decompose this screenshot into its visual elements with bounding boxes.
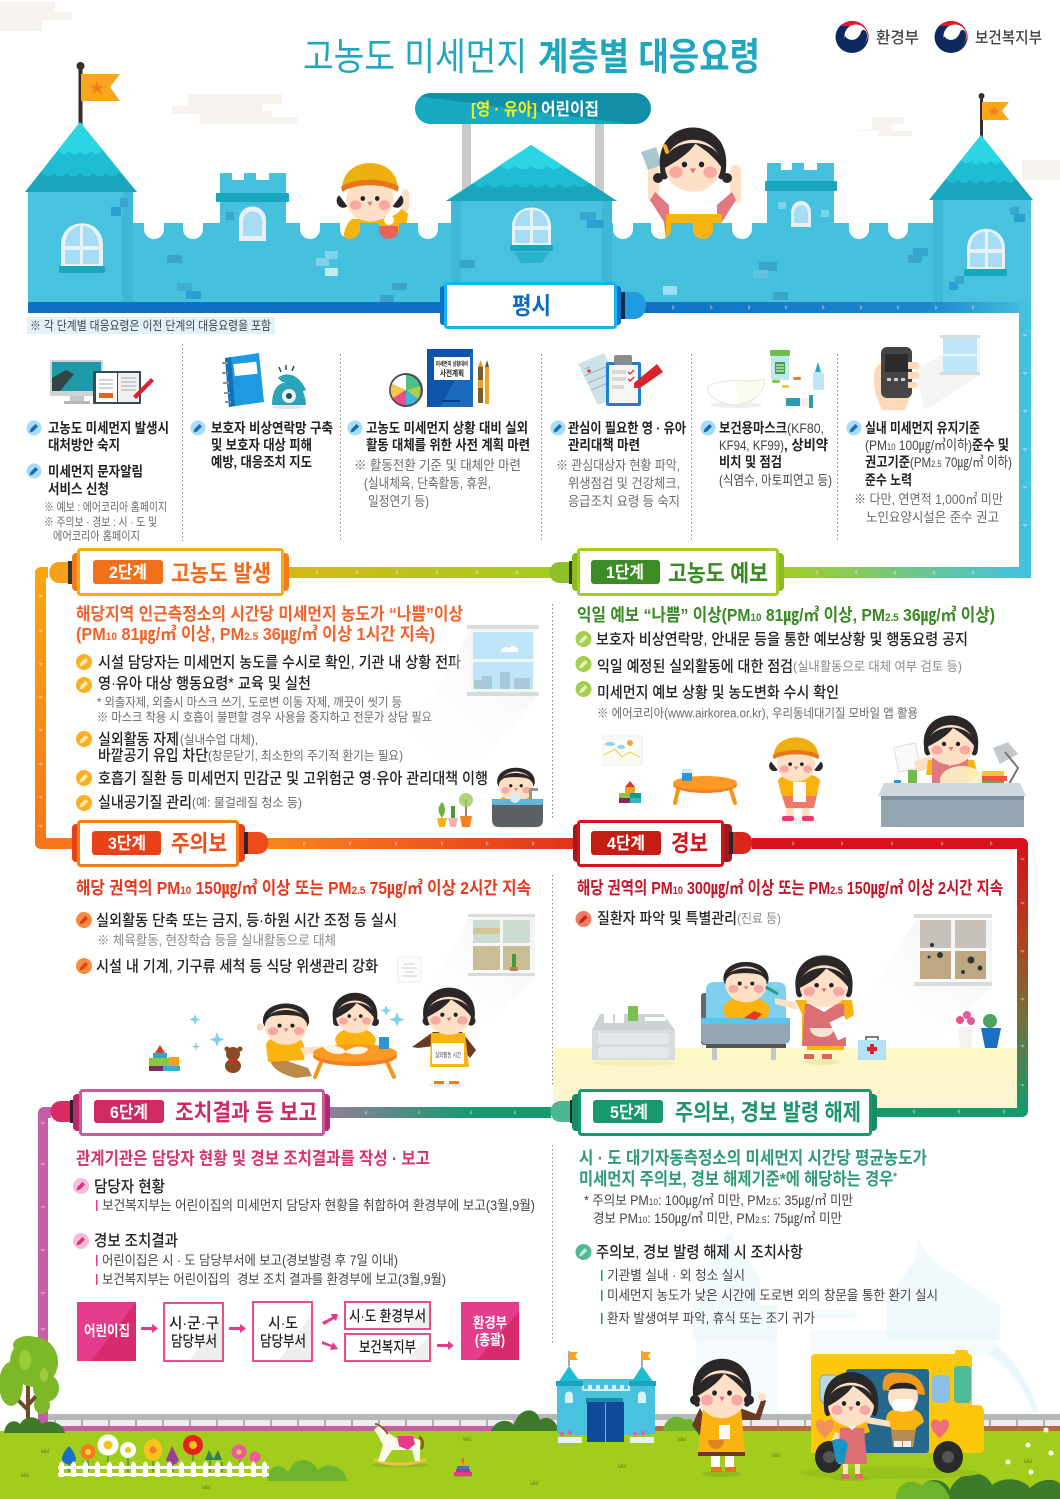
- timeline: magenta left bar and green connector: [38, 1107, 551, 1425]
- icon: clipboard and pencil: [578, 353, 663, 406]
- child in bus with mask: [883, 1373, 925, 1447]
- bullet: [576, 1244, 592, 1260]
- panel: 평시 column 6: ※ 다만, 연면적 1,000㎡ 미만: [854, 492, 1003, 507]
- box: 시도 담당부서: 시·도: [268, 1315, 298, 1332]
- icon: clock and plan book: [389, 349, 489, 407]
- panel: 평시 column 3: 일정연기 등): [368, 494, 429, 509]
- blocks: [149, 1045, 180, 1071]
- title: [303, 37, 760, 79]
- icon: hand with air monitor and window: [874, 335, 980, 410]
- school bus: [800, 1350, 984, 1479]
- sign: 영유아 어린이집: [영 · 유아]: [471, 100, 537, 119]
- window: small tower right: [791, 201, 811, 227]
- bullet: [846, 420, 862, 436]
- bullet: [76, 731, 92, 747]
- panel: 2단계 text: [76, 604, 488, 812]
- bullet: [576, 911, 592, 927]
- title: 계층별 대응요령: [538, 37, 760, 79]
- mini castle: [556, 1351, 656, 1443]
- panel: 2단계 text: 해당지역 인근측정소의 시간당 미세먼지 농도가 “나쁨”이상: [76, 604, 463, 624]
- panel: 2단계 text: 호흡기 질환 등 미세먼지 민감군 및 고위험군 영·유아 관리대책 이행: [98, 770, 488, 788]
- bullet: [26, 420, 42, 436]
- panel: 6단계 text: 담당자 현황: [94, 1178, 165, 1196]
- heading: 4단계 경보: 4단계: [607, 834, 645, 853]
- heading: 4단계 경보: 경보: [671, 830, 708, 856]
- castle tower left: [25, 122, 137, 303]
- panel: 5단계 text: *: [893, 1171, 898, 1183]
- title: 고농도 미세먼지: [303, 37, 527, 79]
- table: [313, 1037, 397, 1077]
- heading: 6단계 조치결과 등 보고: 조치결과 등 보고: [175, 1099, 317, 1125]
- illustration: child reading: [769, 737, 823, 824]
- panel: 평시 column 4: 관심이 필요한 영 · 유아: [568, 420, 686, 436]
- heading: 6단계 조치결과 등 보고: 6단계: [110, 1103, 148, 1122]
- illustration: floor: [553, 1048, 1017, 1108]
- panel: 평시 column 4: 관리대책 마련: [568, 437, 640, 453]
- illustration: weather poster: [603, 736, 642, 765]
- timeline: 평시 blue bar: [28, 302, 1031, 578]
- character: teacher on wall: [641, 127, 741, 262]
- illustration: clear window: [395, 625, 539, 760]
- bear: [224, 1046, 242, 1073]
- panel: 평시 column 1: 고농도 미세먼지 발생시: [48, 420, 169, 436]
- grass: [0, 1431, 1060, 1499]
- bullet: [576, 681, 592, 697]
- bullet: [76, 912, 92, 928]
- sparkles: [190, 1005, 404, 1051]
- panel: 2단계 text: (창문닫기, 최소한의 주기적 환기는 필요): [208, 749, 403, 763]
- heading: 5단계 주의보 경보 발령 해제: [550, 1090, 877, 1134]
- small castle tower right: [765, 163, 837, 234]
- panel: 평시 column 1: ※ 예보 : 에어코리아 홈페이지: [44, 500, 167, 514]
- panel: 평시 column 3: [348, 349, 530, 509]
- panel: 2단계 text: 영·유아 대상 행동요령* 교육 및 실천: [98, 674, 311, 692]
- heading: 1단계 고농도 예보: 1단계: [606, 563, 644, 582]
- panel: 3단계 text: 해당 권역의 PM10 150㎍/㎥ 이상 또는 PM2.5 75㎍/㎥ 이상 2시간 지속: [76, 878, 531, 899]
- panel: 2단계 text: (예: 물걸레질 청소 등): [192, 796, 302, 810]
- panel: 5단계 text: 기관별 실내 · 외 청소 실시: [607, 1268, 745, 1283]
- illustration: dusty window: [835, 914, 992, 1048]
- teacher waving: [690, 1359, 766, 1477]
- flowers: [62, 1434, 260, 1472]
- panel: 평시 column 3: 고농도 미세먼지 상황 대비 실외: [366, 420, 528, 436]
- heading: 3단계 주의보: 3단계: [108, 834, 146, 853]
- tree: [0, 1336, 65, 1433]
- panel: 평시 column 5: (식염수, 아토피연고 등): [719, 473, 832, 488]
- dividers: [182, 344, 838, 1345]
- illustration: hazy window with cactus: [410, 914, 535, 1025]
- illustration: paper note: [398, 957, 421, 982]
- box: 시도 환경부서: [345, 1302, 430, 1329]
- bullet: [550, 420, 566, 436]
- panel: 평시 column 6: (PM10 100㎍/㎥이하): [865, 437, 972, 454]
- grass tufts: [21, 1436, 1032, 1489]
- panel: 평시 column 3: (실내체육, 단축활동, 휴원,: [364, 476, 491, 491]
- panel: 1단계 text: [576, 605, 995, 720]
- illustration: orange table: [673, 769, 737, 803]
- panel: 6단계 text: 어린이집은 시 · 도 담당부서에 보고(경보발령 후 7일 이내): [102, 1253, 398, 1268]
- panel: 1단계 text: 익일 예보 “나쁨” 이상(PM10 81㎍/㎥ 이상, PM2.5 36㎍/㎥ 이상): [577, 605, 995, 626]
- panel: 1단계 text: (실내활동으로 대체 여부 검토 등): [793, 659, 962, 674]
- castle wall: [133, 223, 935, 303]
- heading: 평시: 평시: [512, 293, 551, 320]
- bullet: [26, 464, 42, 478]
- bullet: [76, 958, 92, 974]
- box: 시군구 담당부서: 담당부서: [171, 1333, 217, 1350]
- box: 보건복지부: 보건복지부: [359, 1339, 416, 1356]
- teacher: [412, 988, 476, 1088]
- panel: 평시 column 1: 에어코리아 홈페이지: [53, 529, 140, 543]
- logo: 환경부: 환경부: [876, 29, 919, 47]
- bullet: [76, 654, 92, 670]
- panel: 3단계 text: ※ 체육활동, 현장학습 등을 실내활동으로 대체: [97, 933, 336, 948]
- heading: 평시: [440, 284, 646, 328]
- panel: 평시 column 1: 서비스 신청: [48, 481, 109, 497]
- icon: mask and medicine: [708, 350, 824, 408]
- bullet: [576, 656, 592, 672]
- box: 시도 담당부서: 담당부서: [260, 1333, 306, 1350]
- panel: 평시 column 6: 준수 노력: [865, 472, 912, 488]
- box: 시도 담당부서: [253, 1302, 312, 1361]
- panel: 4단계 text: [576, 878, 1003, 928]
- panel: 평시 column 5: (KF80,: [787, 420, 824, 436]
- box: 환경부 총괄: (총괄): [475, 1332, 505, 1349]
- panel: 평시 column 4: ※ 관심대상자 현황 파악,: [556, 458, 680, 473]
- fence: [48, 1414, 1060, 1431]
- panel: 2단계 text: 실외활동 자제: [98, 730, 179, 748]
- icon: clock and plan book: 미세먼지 상황대비: [436, 360, 468, 368]
- ground scene: [0, 1336, 1060, 1499]
- box: 어린이집: 어린이집: [84, 1323, 130, 1340]
- box: 환경부 총괄: 환경부: [473, 1315, 507, 1332]
- panel: 평시 column 6: 권고기준: [865, 454, 910, 470]
- boy: [256, 1004, 324, 1078]
- timeline: orange left bar and green connector: [35, 567, 551, 849]
- panel: 평시 column 2: 및 보호자 대상 피해: [211, 437, 312, 453]
- panel: 2단계 text: * 외출자제, 외출시 마스크 쓰기, 도로변 이동 자제, 깨끗이 씻기 등: [97, 696, 402, 710]
- icon: notebook and telephone: [222, 353, 306, 409]
- panel: 2단계 text: 바깥공기 유입 차단: [98, 746, 208, 764]
- flow chart: reporting chain: [77, 1302, 519, 1361]
- panel: 평시 column 3: 활동 대체를 위한 사전 계획 마련: [366, 437, 530, 453]
- illustration: children with table and teacher: [149, 988, 476, 1088]
- character: child in yellow hat on wall: [337, 163, 409, 262]
- bullet: [76, 770, 92, 786]
- panel: 6단계 text: 보건복지부는 어린이집의 미세먼지 담당자 현황을 취합하여 환경부에 보고(3월,9월): [102, 1198, 535, 1213]
- logo: 환경부: [836, 21, 919, 53]
- panel: 3단계 text: [76, 878, 531, 976]
- illustration: first aid kit and plants: [858, 1011, 1001, 1060]
- panel: 평시 column 2: 보호자 비상연락망 구축: [211, 420, 333, 436]
- panel: 2단계 text: (PM10 81㎍/㎥ 이상, PM2.5 36㎍/㎥ 이상 1시간 지속): [76, 624, 435, 645]
- bullet: [576, 631, 592, 647]
- arrow: [141, 1324, 158, 1333]
- illustration: potted plants: [437, 793, 473, 827]
- illustration: sick child on sofa: [701, 962, 790, 1060]
- panel: 4단계 text: 해당 권역의 PM10 300㎍/㎥ 이상 또는 PM2.5 150㎍/㎥ 이상 2시간 지속: [577, 878, 1003, 899]
- heading: 5단계 주의보 경보 발령 해제: 주의보, 경보 발령 해제: [675, 1099, 861, 1125]
- rocking horse: [372, 1424, 428, 1468]
- illustration: teacher with thermometer: [765, 955, 854, 1065]
- panel: 1단계 text: 보호자 비상연락망, 안내문 등을 통한 예보상황 및 행동요령 공지: [596, 630, 968, 648]
- box: 어린이집: [77, 1302, 136, 1361]
- daisies: [1006, 1428, 1054, 1474]
- panel: 4단계 text: 질환자 파악 및 특별관리: [597, 910, 737, 928]
- panel: 5단계 text: 미세먼지 주의보, 경보 해제기준*에 해당하는 경우: [579, 1169, 937, 1189]
- panel: 평시 column 1: 미세먼지 문자알림: [48, 464, 143, 480]
- logo: 보건복지부: 보건복지부: [975, 29, 1042, 47]
- bullet: [76, 795, 92, 811]
- illustration: teacher at desk: [878, 716, 1026, 827]
- panel: 2단계 text: (실내수업 대체),: [180, 733, 258, 747]
- panel: 1단계 text: ※ 에어코리아(www.airkorea.or.kr), 우리동네대기질 모바일 앱 활용: [597, 706, 918, 720]
- panel: 평시 column 2: [190, 353, 333, 470]
- arrow down: [322, 1341, 338, 1350]
- logo: 보건복지부: [934, 21, 1042, 53]
- arrow up: [322, 1314, 338, 1325]
- panel: 6단계 text: 보건복지부는 어린이집의 경보 조치 결과를 환경부에 보고(3월,9월): [102, 1272, 446, 1287]
- bullet: [73, 1233, 89, 1249]
- bullet: [348, 420, 362, 436]
- panel: 평시 column 5: 보건용마스크: [719, 420, 787, 436]
- heading: 2단계 고농도 발생: 고농도 발생: [171, 560, 271, 586]
- panel: 평시 column 3: ※ 활동전환 기준 및 대체안 마련: [354, 458, 521, 473]
- bullet: [190, 420, 206, 436]
- sign: 영유아 어린이집: 어린이집: [541, 100, 599, 119]
- note: ※ 각 단계별 대응요령은 이전 단계의 대응요령을 포함: [30, 319, 271, 333]
- panel: 평시 column 1: [26, 360, 169, 543]
- panel: 평시 column 6: [846, 335, 1012, 525]
- panel: 평시 column 5: [700, 350, 832, 488]
- heading: 6단계 조치결과 등 보고: [50, 1090, 330, 1134]
- panel: 평시 column 5: , 상비약: [784, 437, 828, 453]
- illustration: cabinet: [592, 1006, 676, 1066]
- panel: 5단계 text: 시 · 도 대기자동측정소의 미세먼지 시간당 평균농도가: [579, 1148, 927, 1168]
- icon: monitor and book: [50, 360, 154, 404]
- box: 시도 환경부서: 시·도 환경부서: [349, 1308, 426, 1325]
- panel: 6단계 text: 관계기관은 담당자 현황 및 경보 조치결과를 작성 · 보고: [76, 1148, 430, 1168]
- panel: 3단계 text: 실외활동 단축 또는 금지, 등·하원 시간 조정 등 실시: [96, 912, 397, 930]
- heading: 2단계 고농도 발생: [49, 550, 289, 594]
- panel: 평시 column 2: 예방, 대응조치 지도: [211, 454, 312, 470]
- bullet: [73, 1178, 89, 1194]
- woman with backpack: [824, 1372, 890, 1481]
- teacher: 실외활동 시간: [435, 1050, 461, 1059]
- sign: 영유아 어린이집: [415, 93, 651, 124]
- panel: 평시 column 5: KF94, KF99): [719, 437, 784, 453]
- window: small tower left: [239, 206, 266, 241]
- panel: 2단계 text: 실내공기질 관리: [98, 794, 192, 812]
- panel: 평시 column 6: 노인요양시설은 준수 권고: [866, 510, 999, 525]
- castle tower center: [446, 145, 617, 303]
- panel: 평시 column 1: ※ 주의보 · 경보 : 시 · 도 및: [44, 515, 157, 529]
- panel: 평시 column 1: 대처방안 숙지: [48, 437, 120, 453]
- heading: 4단계 경보: [573, 822, 752, 866]
- panel: 6단계 text: [73, 1148, 535, 1287]
- timeline: red line and gradient down: [752, 838, 1028, 1117]
- illustration: toy blocks: [619, 781, 641, 803]
- panel: 평시 column 6: 실내 미세먼지 유지기준: [865, 420, 980, 436]
- panel: 3단계 text: 시설 내 기계, 기구류 세척 등 식당 위생관리 강화: [96, 958, 378, 976]
- panel: 5단계 text: [576, 1148, 938, 1326]
- sign posts: [462, 120, 604, 195]
- panel: 평시 column 4: 위생점검 및 건강체크,: [568, 476, 680, 491]
- bushes: [267, 1410, 1060, 1499]
- panel: 2단계 text: 시설 담당자는 미세먼지 농도를 수시로 확인, 기관 내 상황 전파: [98, 654, 461, 672]
- heading: 3단계 주의보: [72, 822, 268, 866]
- arrow: [437, 1341, 454, 1350]
- girl: [333, 993, 379, 1052]
- panel: 평시 column 6: (PM2.5 70㎍/㎥ 이하): [910, 454, 1012, 471]
- arrow: [229, 1324, 246, 1333]
- heading: 1단계 고농도 예보: 고농도 예보: [668, 560, 768, 586]
- panel: 1단계 text: 익일 예정된 실외활동에 대한 점검: [597, 658, 793, 676]
- panel: 평시 column 6: 준수 및: [972, 437, 1009, 453]
- stacking toy: [453, 1458, 473, 1478]
- right flag: [978, 93, 1009, 138]
- timeline: orange-red connector: [268, 838, 574, 849]
- panel: 평시 column 4: 응급조치 요령 등 숙지: [568, 494, 680, 509]
- left flag: [76, 62, 120, 126]
- panel: 4단계 text: (진료 등): [737, 911, 781, 926]
- castle tower right: [929, 135, 1033, 303]
- panel: 6단계 text: 경보 조치결과: [94, 1232, 178, 1250]
- small castle tower left: [216, 173, 289, 230]
- panel: 5단계 text: 주의보, 경보 발령 해제 시 조치사항: [596, 1244, 803, 1262]
- icon: clock and plan book: 사전계획: [440, 368, 464, 378]
- panel: 5단계 text: 미세먼지 농도가 낮은 시간에 도로변 외의 창문을 통한 환기 실시: [607, 1288, 938, 1303]
- panel: 5단계 text: 환자 발생여부 파악, 휴식 또는 조기 귀가: [607, 1311, 815, 1326]
- background: faint castle and playground: [693, 1232, 1038, 1415]
- bullet: [76, 677, 92, 693]
- panel: 5단계 text: 경보 PM10: 150㎍/㎥ 미만, PM2.5: 75㎍/㎥ 미만: [593, 1211, 842, 1227]
- heading: 5단계 주의보 경보 발령 해제: 5단계: [610, 1103, 648, 1122]
- heading: 1단계 고농도 예보: [550, 550, 784, 594]
- bullet: [700, 420, 716, 436]
- panel: 5단계 text: * 주의보 PM10: 100㎍/㎥ 미만, PM2.5: 35㎍/㎥ 미만: [584, 1193, 853, 1209]
- illustration: child washing hands: [489, 768, 543, 829]
- box: 보건복지부: [345, 1334, 430, 1361]
- panel: 평시 column 4: [550, 353, 686, 509]
- panel: 2단계 text: ※ 마스크 착용 시 호흡이 불편할 경우 사용을 중지하고 전문가 상담 필요: [97, 710, 432, 724]
- panel: 1단계 text: 미세먼지 예보 상황 및 농도변화 수시 확인: [597, 684, 839, 702]
- box: 시군구 담당부서: 시·군·구: [169, 1315, 219, 1332]
- heading: 2단계 고농도 발생: 2단계: [109, 563, 147, 582]
- decorative clouds: [0, 2, 1060, 180]
- box: 시군구 담당부서: [164, 1303, 223, 1361]
- heading: 3단계 주의보: 주의보: [171, 830, 227, 856]
- white picket fence: [58, 1461, 269, 1477]
- panel: 평시 column 5: 비치 및 점검: [719, 454, 782, 470]
- box: 환경부 총괄: [461, 1302, 519, 1360]
